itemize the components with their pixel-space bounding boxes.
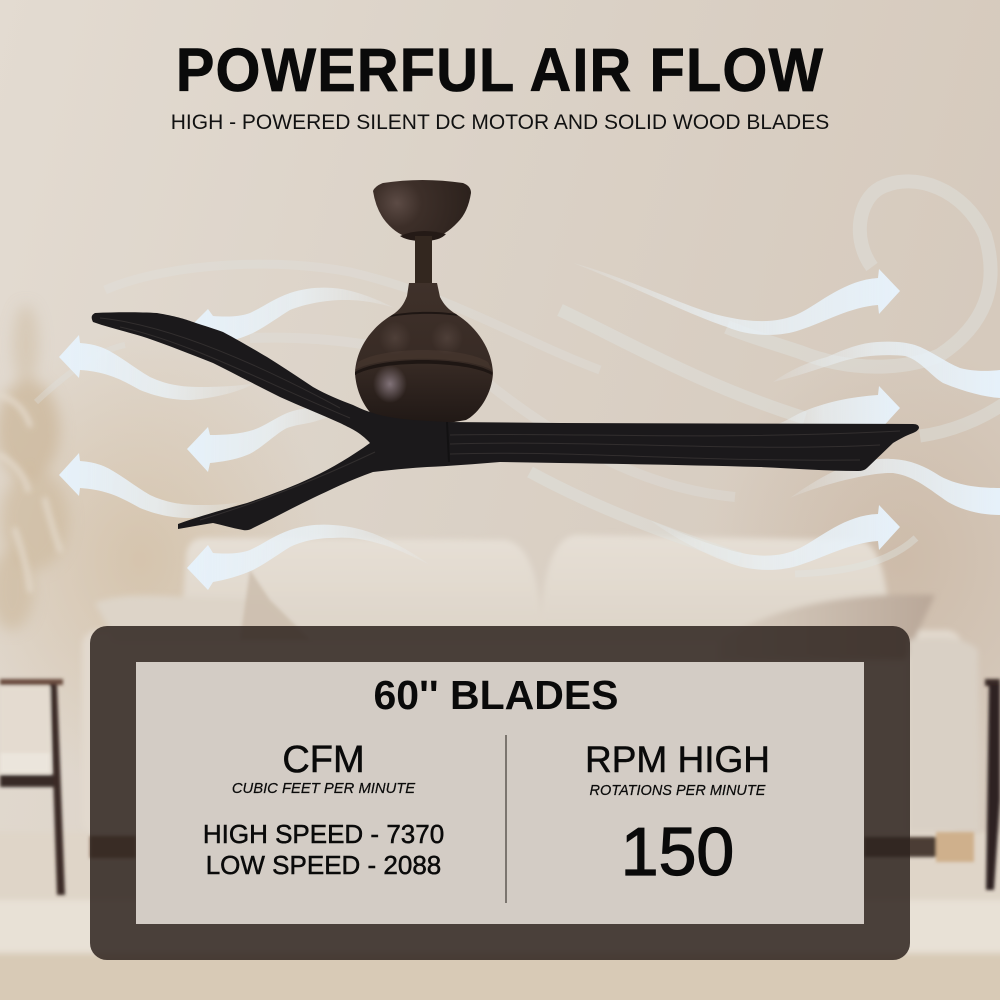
panel heading: 60'' BLADES — [373, 672, 619, 718]
pampas grass — [0, 305, 69, 630]
fan downrod — [415, 236, 432, 284]
fan canopy — [373, 180, 471, 238]
arrow: centre left — [187, 408, 340, 472]
floor — [0, 832, 1000, 1000]
title: POWERFUL AIR FLOW — [176, 36, 824, 104]
sofa base shadow — [90, 570, 974, 862]
subtitle: HIGH - POWERED SILENT DC MOTOR AND SOLID WOOD BLADES — [171, 111, 829, 134]
motor band — [355, 360, 492, 375]
canopy collar — [400, 231, 446, 241]
arrow: lower right — [650, 505, 900, 570]
CFM values — [203, 819, 444, 880]
arrow: middle right — [760, 386, 900, 434]
arrow: lower left — [59, 453, 240, 518]
CFM values: LOW SPEED - 2088 — [206, 850, 441, 880]
arrow: top left above blade — [187, 288, 395, 352]
panel divider — [505, 735, 506, 903]
arrow: bottom left — [187, 525, 430, 590]
CFM heading: CFM — [282, 739, 365, 781]
fan motor housing — [355, 283, 493, 424]
CFM values: HIGH SPEED - 7370 — [203, 819, 444, 849]
spec panel inner card — [136, 662, 864, 924]
RPM value: 150 — [621, 814, 734, 890]
arrow: upper right — [573, 263, 900, 335]
RPM heading: RPM HIGH — [585, 739, 770, 780]
blade wood grain — [100, 318, 900, 520]
arrow: upper left — [59, 335, 255, 400]
fan blades — [92, 312, 919, 530]
left chair — [0, 679, 65, 895]
spec panel outer dark frame — [90, 626, 910, 960]
CFM caption: CUBIC FEET PER MINUTE — [232, 781, 415, 797]
right chair — [985, 679, 1000, 890]
stream: right lower flowing off page — [790, 459, 1000, 515]
sofa — [82, 535, 980, 835]
faint air ribbons — [36, 181, 1000, 574]
stream: right upper flowing off page — [773, 342, 1000, 398]
RPM caption: ROTATIONS PER MINUTE — [590, 783, 765, 799]
